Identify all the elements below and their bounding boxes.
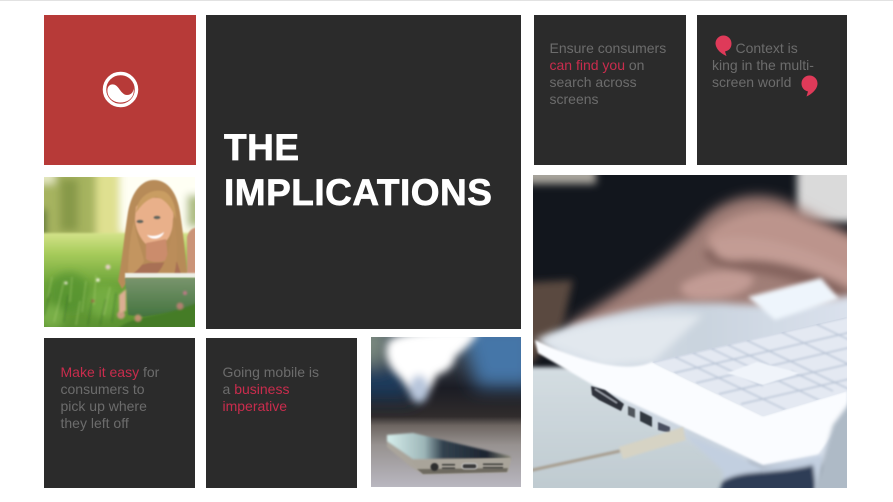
text: ensure consumers: screens xyxy=(550,91,599,107)
photo: woman with tablet on grass xyxy=(44,177,195,327)
text: going mobile: a business xyxy=(222,381,289,397)
icon: swirl logo xyxy=(102,72,138,108)
panel: title xyxy=(206,15,521,329)
text: context is king: screen world xyxy=(712,74,791,90)
top rule xyxy=(0,0,893,1)
heading: the implications xyxy=(224,127,492,212)
panel: going mobile xyxy=(206,338,357,488)
grass shading xyxy=(40,272,120,329)
phone xyxy=(387,433,511,474)
text: ensure consumers: Ensure consumers xyxy=(550,40,666,56)
text: make it easy: pick up where xyxy=(60,398,147,414)
photo: smartphone on table xyxy=(371,337,521,487)
text: make it easy: consumers to xyxy=(60,381,145,397)
keyboard xyxy=(652,318,847,415)
heading: the implications: IMPLICATIONS xyxy=(224,172,492,212)
icon: closing quote mark xyxy=(802,76,818,96)
ports xyxy=(591,386,670,433)
icon: opening quote mark xyxy=(716,36,732,56)
text: context is king xyxy=(712,40,814,90)
panel: context quote xyxy=(697,15,847,165)
woman xyxy=(118,180,201,289)
text: going mobile xyxy=(222,364,319,414)
text: ensure consumers: can find you on xyxy=(550,57,644,73)
cable xyxy=(528,427,686,471)
text: going mobile: imperative xyxy=(222,398,287,414)
panel: search across screens xyxy=(534,15,686,165)
photo: hand on white laptop xyxy=(533,175,847,488)
desk xyxy=(518,367,748,502)
laptop body xyxy=(535,293,863,471)
heading: the implications: THE xyxy=(224,127,300,168)
text: make it easy xyxy=(60,364,159,431)
panel: red logo xyxy=(44,15,196,165)
hand xyxy=(568,196,863,340)
text: ensure consumers: search across xyxy=(550,74,637,90)
text: ensure consumers xyxy=(550,40,666,107)
panel: make it easy xyxy=(44,338,195,488)
text: going mobile: Going mobile is xyxy=(222,364,319,380)
laptop underside xyxy=(683,433,823,495)
text: context is king: Context is xyxy=(736,40,798,56)
text: make it easy: Make it easy for xyxy=(60,364,159,380)
tablet xyxy=(125,273,199,278)
text: make it easy: they left off xyxy=(60,415,129,431)
trackpad glow xyxy=(748,278,839,320)
front edge xyxy=(535,340,847,465)
text: context is king: king in the multi- xyxy=(712,57,814,73)
